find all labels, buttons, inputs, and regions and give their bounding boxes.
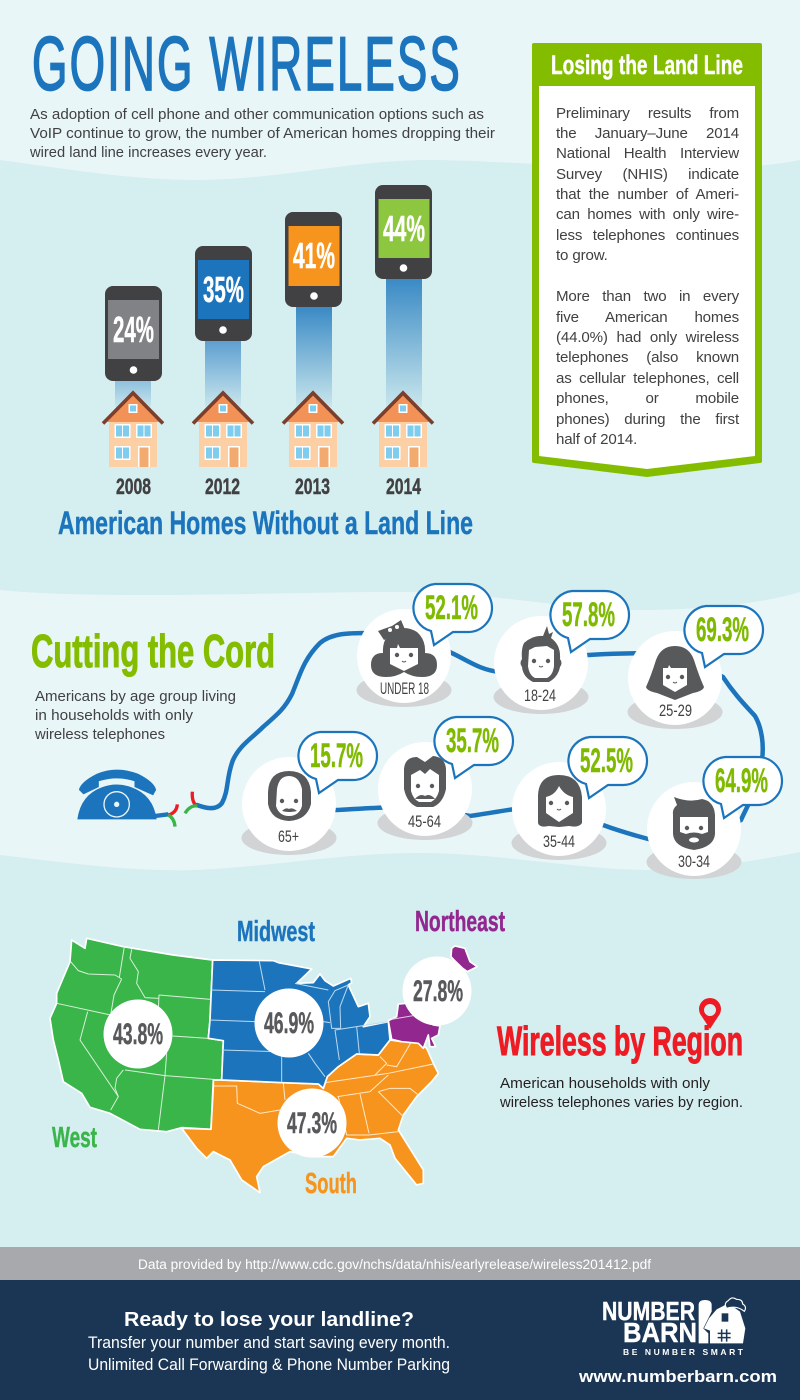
- panel body text: telephones (also known: [556, 349, 739, 366]
- text: wireless by region description: American households with only: [500, 1075, 711, 1092]
- panel body text: as cellular telephones, cell: [556, 370, 739, 387]
- bar 2012: 35%: [203, 269, 244, 310]
- callout: 69.3%: 69.3%: [696, 611, 749, 649]
- text: cutting the cord description: wireless telephones: [34, 726, 165, 743]
- heading: cutting the cord: Cutting the Cord: [31, 625, 275, 677]
- logo: number barn: BARN: [623, 1317, 697, 1348]
- logo: number barn: [602, 1296, 745, 1357]
- panel body text: phones, or mobile: [556, 390, 739, 407]
- panel body text: Preliminary results from: [556, 104, 739, 122]
- bar 2012: [193, 246, 253, 499]
- stat: west 43.8%: [104, 1000, 172, 1068]
- stat: northeast 27.8%: [402, 956, 472, 1026]
- stat: midwest 46.9%: 46.9%: [264, 1007, 314, 1040]
- bar 2008: 2008: [116, 474, 151, 499]
- icon: woman with bob: [646, 646, 704, 700]
- text: cutting the cord description: Americans by age group living: [35, 688, 236, 705]
- bar 2008: 24%: [113, 309, 154, 350]
- callout: 57.8%: 57.8%: [562, 596, 615, 634]
- bar 2014: 44%: [383, 208, 425, 249]
- call to action heading: Ready to lose your landline?: [124, 1309, 414, 1331]
- intro text: VoIP continue to grow, the number of American homes dropping their: [30, 125, 495, 142]
- stat: south 47.3%: 47.3%: [287, 1107, 337, 1140]
- age group: 45-64: 45-64: [408, 812, 441, 831]
- icon: man with moustache: [404, 756, 446, 807]
- callout: 52.1%: 52.1%: [425, 589, 478, 627]
- bar 2014: 2014: [386, 474, 422, 499]
- source bar: Data provided by http://www.cdc.gov/nchs/data/nhis/earlyrelease/wireless201412.pdf: [138, 1257, 651, 1272]
- stat: northeast 27.8%: 27.8%: [413, 975, 463, 1008]
- age group: under 18: UNDER 18: [380, 679, 429, 698]
- label: south: South: [305, 1168, 357, 1200]
- icon: young man: [520, 626, 562, 682]
- callout: 35.7%: 35.7%: [446, 722, 499, 760]
- source bar: [0, 1247, 800, 1280]
- stat: south 47.3%: [278, 1088, 346, 1158]
- intro text: As adoption of cell phone and other communication options such as: [30, 106, 484, 123]
- icon: location pin: [699, 998, 721, 1029]
- logo: number barn: NUMBER: [602, 1296, 695, 1326]
- bar 2013: [283, 212, 343, 499]
- icon: girl with bow: [371, 620, 437, 677]
- chart: American homes without a land line: [103, 185, 433, 499]
- age group: 65+: 65+: [278, 827, 299, 846]
- region: northeast: [388, 946, 477, 1048]
- icon: telephone: [77, 769, 197, 827]
- age group: 18-24: 18-24: [524, 686, 556, 705]
- icon: balding older man: [268, 771, 311, 821]
- panel body text: Survey (NHIS) indicate: [556, 166, 739, 183]
- call to action text: [88, 1334, 450, 1374]
- age group: 35-44: 35-44: [543, 832, 575, 851]
- panel body text: less telephones continues: [556, 227, 739, 244]
- age group: under 18: [356, 584, 492, 707]
- intro text: wired land line increases every year.: [29, 144, 267, 161]
- panel: losing the land line: [532, 43, 762, 477]
- footer panel: [0, 1280, 800, 1400]
- map: United States by region: [50, 938, 477, 1193]
- bar 2013: 41%: [293, 235, 335, 276]
- website address: www.numberbarn.com: [578, 1367, 777, 1386]
- panel body text: half of 2014.: [556, 431, 637, 448]
- callout: 15.7%: 15.7%: [310, 737, 363, 775]
- panel body text: (44.0%) had only wireless: [556, 329, 739, 346]
- age group: 25-29: [628, 606, 763, 729]
- region: midwest: [208, 960, 390, 1088]
- panel body text: National Health Interview: [556, 145, 739, 162]
- panel body text: to grow.: [556, 247, 608, 264]
- label: northeast: Northeast: [415, 906, 505, 938]
- panel body text: that the number of Ameri-: [556, 186, 739, 203]
- panel body text: [556, 104, 740, 448]
- call to action text: Transfer your number and start saving every month.: [88, 1334, 450, 1352]
- age group: 25-29: 25-29: [659, 701, 692, 720]
- panel body text: five American homes: [556, 309, 739, 326]
- panel body text: More than two in every: [556, 288, 739, 305]
- intro text: [29, 106, 495, 161]
- text: cutting the cord description: [34, 688, 236, 743]
- text: cutting the cord description: in households with only: [35, 707, 193, 724]
- stat: midwest 46.9%: [254, 988, 324, 1058]
- chart caption: American Homes Without a Land Line: [58, 505, 473, 541]
- bar 2008: [103, 286, 163, 499]
- age group: 35-44: [512, 737, 647, 860]
- stat: west 43.8%: 43.8%: [113, 1018, 163, 1051]
- panel body text: the January–June 2014: [556, 125, 739, 142]
- region: south: [182, 1038, 438, 1193]
- age group: 65+: [242, 732, 377, 855]
- icon: bearded man: [673, 797, 715, 850]
- bar 2014: [373, 185, 433, 499]
- panel body text: can homes with only wire-: [556, 206, 739, 223]
- bar 2013: 2013: [295, 474, 330, 499]
- text: wireless by region description: wireless telephones varies by region.: [499, 1094, 743, 1111]
- bar 2012: 2012: [205, 474, 240, 499]
- callout: 52.5%: 52.5%: [580, 742, 633, 780]
- icon: woman with long hair: [538, 775, 582, 827]
- age group: 18-24: [494, 591, 629, 714]
- region: west: [50, 938, 223, 1132]
- label: west: West: [52, 1122, 97, 1154]
- call to action text: Unlimited Call Forwarding & Phone Number Parking: [88, 1356, 450, 1374]
- age group: 30-34: 30-34: [678, 852, 710, 871]
- label: midwest: Midwest: [237, 916, 315, 948]
- panel body text: phones) during the first: [556, 411, 739, 428]
- logo: number barn: BE NUMBER SMART: [623, 1347, 744, 1357]
- title: GOING WIRELESS: [32, 22, 460, 107]
- cord line: [197, 633, 763, 850]
- age group: 45-64: [378, 717, 513, 840]
- text: wireless by region description: [499, 1075, 743, 1111]
- age group: 30-34: [646, 757, 782, 879]
